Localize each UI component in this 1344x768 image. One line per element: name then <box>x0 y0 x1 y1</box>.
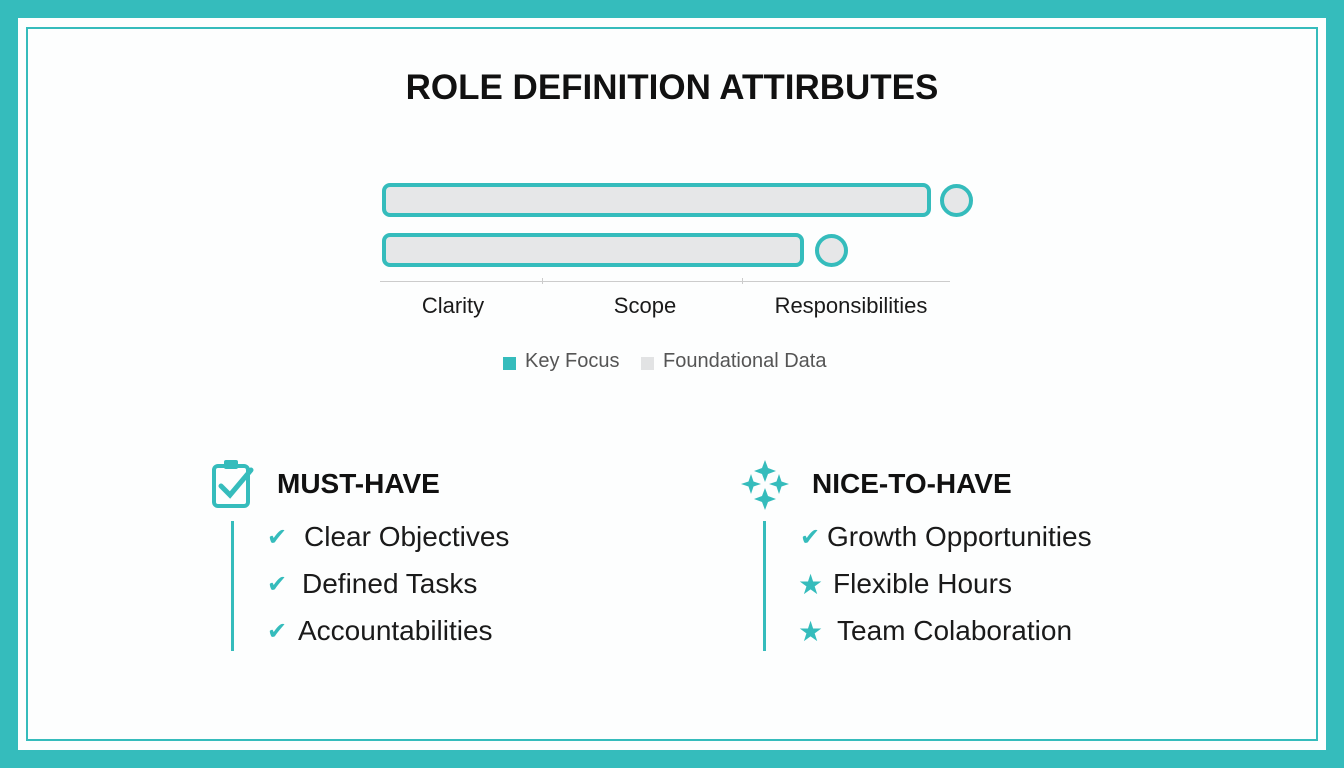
panel: must-have <box>212 460 509 651</box>
list: ✔ <box>267 571 287 598</box>
legend <box>503 350 826 372</box>
list <box>267 521 509 646</box>
axis labels: Clarity <box>422 293 484 318</box>
title: ROLE DEFINITION ATTIRBUTES <box>406 68 938 107</box>
bar chart: Scope <box>614 293 676 318</box>
list: Team Colaboration <box>837 615 1072 646</box>
legend: Key Focus <box>525 350 619 372</box>
list: Flexible Hours <box>833 568 1012 599</box>
marker: row 1 <box>940 184 973 217</box>
icon: clipboard check <box>212 460 254 508</box>
bar: row 1 <box>382 183 931 217</box>
list: Growth Opportunities <box>827 521 1092 552</box>
legend: Foundational Data <box>663 350 826 372</box>
heading: NICE-TO-HAVE <box>812 468 1012 499</box>
list: Defined Tasks <box>302 568 477 599</box>
bar chart <box>380 183 973 372</box>
list <box>798 521 1092 647</box>
list: Accountabilities <box>298 615 493 646</box>
list: ★ <box>798 616 823 647</box>
icon: sparkles <box>741 460 789 510</box>
bar: row 2 <box>382 233 804 267</box>
bar chart: Responsibilities <box>775 293 927 318</box>
heading: MUST-HAVE <box>277 468 440 499</box>
marker: row 2 <box>815 234 848 267</box>
list: ✔ <box>267 524 287 551</box>
list: ✔ <box>800 524 820 551</box>
list: ★ <box>798 569 823 600</box>
list: ✔ <box>267 618 287 645</box>
panel: nice-to-have <box>741 460 1092 651</box>
list: Clear Objectives <box>304 521 509 552</box>
